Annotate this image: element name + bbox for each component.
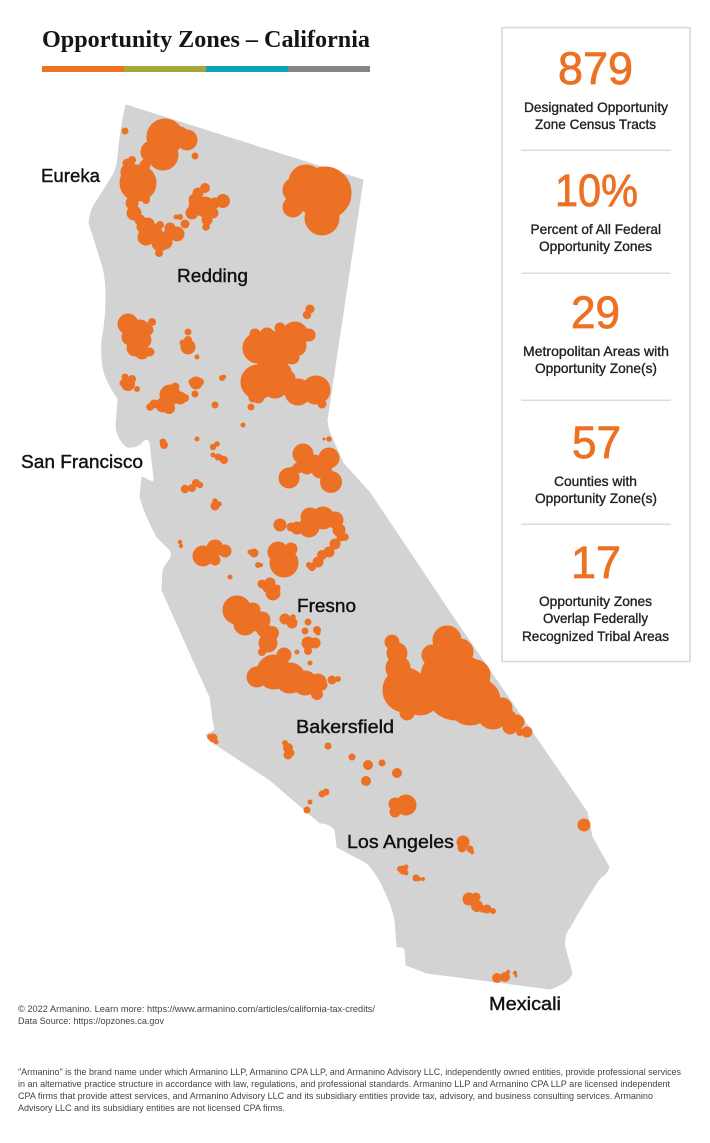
stat: 29 metropolitan areas: Opportunity Zone(s) [535,360,657,376]
stat: 10 percent of federal zones: Opportunity Zones [539,238,652,254]
stat: 17 tribal area overlaps: Recognized Tribal Areas [522,628,669,644]
legal disclaimer [18,1067,681,1113]
stat: 57 counties [535,417,657,506]
city label: Bakersfield: Bakersfield [296,716,394,737]
legal disclaimer: Advisory LLC and its subsidiary entities are not licensed CPA firms. [18,1103,285,1113]
city label: Los Angeles: Los Angeles [347,831,454,852]
title: Opportunity Zones – California [42,26,370,53]
bubbles: Bay Area and central coast [160,437,232,579]
map of California [89,105,609,989]
legal disclaimer: "Armanino" is the brand name under which Armanino LLP, Armanino CPA LLP, and Armanino Advisory LLC, independently owned entities, provide professional services [18,1067,681,1077]
bubbles: Tahoe and Sierra foothills [274,437,348,570]
source and copyright note [18,1004,375,1026]
stat: 10 percent of federal zones: Percent of All Federal [530,221,661,237]
stat: 879 census tracts: 879 [558,43,633,94]
city label: Fresno: Fresno [297,595,356,616]
bubbles: far north coast [120,119,230,256]
legal disclaimer: in an alternative practice structure in accordance with law, regulations, and professional standards. Armanino LLP and Armanino CPA LLP are licensed independent [18,1079,670,1089]
city label: Redding: Redding [177,265,248,286]
stat: 10 percent of federal zones: 10% [555,165,638,216]
stat: 57 counties: Opportunity Zone(s) [535,490,657,506]
bubbles: Mojave desert cluster [383,626,532,737]
stat: 29 metropolitan areas: 29 [571,287,620,338]
bubbles: northeast cluster [283,165,351,235]
city label: Mexicali: Mexicali [489,993,561,1014]
stat: 879 census tracts: Designated Opportunity [524,99,668,115]
bubbles: Central Valley [223,542,340,700]
title colour bar [42,66,370,72]
panel: key statistics [502,28,690,662]
stat: 10 percent of federal zones [530,165,661,254]
stat: 879 census tracts: Zone Census Tracts [535,116,656,132]
bubbles: north coast and Sacramento valley small clusters [118,314,245,427]
city label: San Francisco: San Francisco [21,451,143,472]
stat: 879 census tracts [524,43,668,132]
city label: Eureka: Eureka [41,165,101,186]
bubbles: Southern California [208,734,590,982]
legal disclaimer: CPA firms that provide attest services, and Armanino Advisory LLC and its subsidiary entities provide tax, advisory, and business consulting services. Armanino [18,1091,653,1101]
source and copyright note: Data Source: https://opzones.ca.gov [18,1016,164,1026]
opportunity zone bubbles [118,119,590,982]
stat: 17 tribal area overlaps: 17 [571,537,621,588]
stat: 57 counties: 57 [572,417,621,468]
stat: 17 tribal area overlaps: Opportunity Zones [539,593,652,609]
stat: 17 tribal area overlaps [522,537,669,644]
stat: 17 tribal area overlaps: Overlap Federally [543,610,648,626]
bubbles: northern Sierra cluster [241,305,330,410]
source and copyright note: © 2022 Armanino. Learn more: https://www.armanino.com/articles/california-tax-credits/ [18,1004,375,1014]
stat: 57 counties: Counties with [554,473,637,489]
stat: 29 metropolitan areas: Metropolitan Areas with [523,343,669,359]
stat: 29 metropolitan areas [523,287,669,376]
city labels [21,165,561,1014]
